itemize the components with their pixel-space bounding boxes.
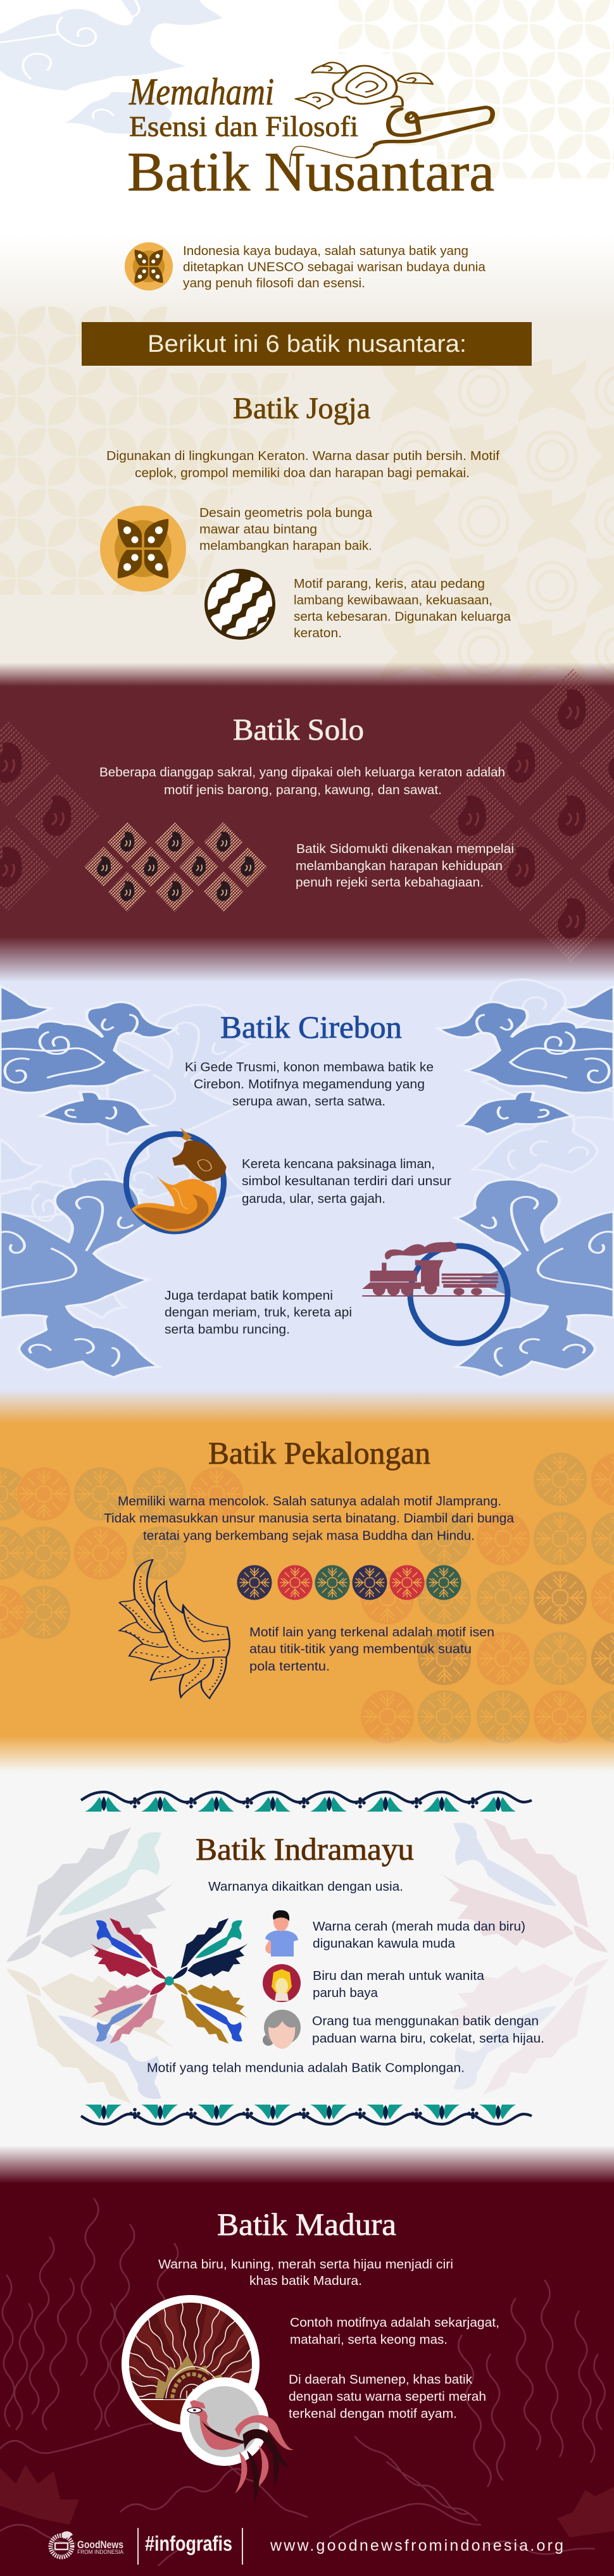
footer: logo: GoodNews xyxy=(77,2539,123,2551)
panel: Batik Pekalongan background xyxy=(0,1389,614,1773)
text block: kompeni xyxy=(165,1289,352,1336)
footer: logo: FROM INDONESIA xyxy=(77,2549,123,2555)
panel: intro and Batik Jogja background xyxy=(0,0,614,690)
heading: Batik Cirebon: Batik Cirebon xyxy=(220,1009,402,1045)
text block: Madura description: khas batik Madura. xyxy=(249,2274,362,2288)
heading: title xyxy=(127,71,494,203)
heading: Batik Pekalongan: Batik Pekalongan xyxy=(208,1435,430,1471)
text block: isen: pola tertentu. xyxy=(249,1660,330,1674)
text block: Sidomukti: Batik Sidomukti dikenakan mempelai xyxy=(296,842,514,856)
icon: sekarjagat sun motif xyxy=(122,2295,260,2432)
text block: Sidomukti: penuh rejeki serta kebahagiaan. xyxy=(296,876,484,890)
icon: middle-aged woman xyxy=(263,1964,301,2002)
text block: kompeni: serta bambu runcing. xyxy=(165,1322,290,1336)
text block: Sumenep xyxy=(289,2373,486,2421)
icon: isen leaf motif xyxy=(120,1560,230,1698)
text block: ceplok: mawar atau bintang xyxy=(199,523,317,537)
text block: Cirebon description: serupa awan, serta satwa. xyxy=(232,1095,385,1109)
text block: Complongan: Motif yang telah mendunia adalah Batik Complongan. xyxy=(147,2062,465,2075)
panel: Batik Madura background xyxy=(0,2146,614,2576)
text block: paksinaga liman: garuda, ular, serta gajah. xyxy=(242,1192,385,1206)
text block: Sumenep: Di daerah Sumenep, khas batik xyxy=(289,2373,473,2387)
footer: logo xyxy=(51,2531,123,2557)
panel: Batik Cirebon background xyxy=(0,980,614,1425)
icon: rooster motif xyxy=(180,2377,294,2503)
text block: parang: Motif parang, keris, atau pedang xyxy=(294,577,485,591)
text block: elderly: Orang tua menggunakan batik dengan xyxy=(312,2015,539,2029)
text block: Sidomukti: melambangkan harapan kehidupan xyxy=(296,859,503,873)
text block: introduction: yang penuh filosofi dan esensi. xyxy=(183,277,365,290)
footer: website: www.goodnewsfromindonesia.org xyxy=(270,2537,563,2554)
text block: sekarjagat: Contoh motifnya adalah sekarjagat, xyxy=(290,2316,499,2330)
text block: Solo description: Beberapa dianggap sakral, yang dipakai oleh keluarga keraton adalah xyxy=(99,766,505,780)
text block: ceplok: Desain geometris pola bunga xyxy=(199,506,373,520)
text block: Sumenep: dengan satu warna seperti merah xyxy=(289,2390,486,2404)
text block: Pekalongan description xyxy=(104,1495,515,1543)
text block: isen: Motif lain yang terkenal adalah motif isen xyxy=(249,1626,494,1640)
text block: ceplok xyxy=(199,506,373,553)
text block: Sidomukti xyxy=(296,842,514,890)
text block: young xyxy=(313,1920,525,1951)
icon: young person xyxy=(265,1910,298,1957)
heading: title: Batik Nusantara xyxy=(127,142,494,203)
text block: Cirebon description xyxy=(185,1061,434,1109)
heading: Batik Solo: Batik Solo xyxy=(233,713,364,747)
heading: Batik Indramayu: Batik Indramayu xyxy=(196,1831,414,1867)
text block: Indramayu intro: Warnanya dikaitkan dengan usia. xyxy=(208,1880,403,1894)
text block: Madura description xyxy=(158,2258,453,2288)
icon: paksinaga liman in ring xyxy=(127,1128,227,1231)
footer: hashtag: #infografis xyxy=(145,2532,232,2555)
text block: elderly xyxy=(312,2015,544,2046)
heading: title: Memahami xyxy=(128,71,274,113)
decoration: top border xyxy=(81,1792,532,1812)
text block: Solo description: motif jenis barong, parang, kawung, dan sawat. xyxy=(164,783,442,797)
text block: paksinaga liman: simbol kesultanan terdiri dari unsur xyxy=(242,1174,451,1188)
text block: paksinaga liman xyxy=(242,1157,451,1206)
text block: Jogja description xyxy=(106,449,499,480)
panel: Batik Indramayu background xyxy=(0,1772,614,2184)
panel: Batik Solo background xyxy=(0,663,614,984)
text block: Sumenep: terkenal dengan motif ayam. xyxy=(289,2407,457,2421)
text block: parang xyxy=(294,577,511,640)
text block: parang: serta kebesaran. Digunakan keluarga xyxy=(294,610,511,624)
banner: six batik: Berikut ini 6 batik nusantara: xyxy=(147,331,467,358)
icon: elderly person xyxy=(263,2010,301,2049)
text block: isen: atau titik-titik yang membentuk suatu xyxy=(249,1643,472,1657)
icon: canting with cloud smoke xyxy=(290,63,492,166)
icon: parang motif xyxy=(204,569,275,640)
text block: introduction: ditetapkan UNESCO sebagai warisan budaya dunia xyxy=(183,261,486,275)
text block: Pekalongan description: teratai yang berkembang sejak masa Buddha dan Hindu. xyxy=(143,1529,475,1543)
text block: Cirebon description: Ki Gede Trusmi, konon membawa batik ke xyxy=(185,1061,434,1074)
text block: Jogja description: ceplok, grompol memiliki doa dan harapan bagi pemakai. xyxy=(135,466,470,480)
text block: Madura description: Warna biru, kuning, merah serta hijau menjadi ciri xyxy=(158,2258,453,2272)
heading: Batik Jogja: Batik Jogja xyxy=(233,392,370,425)
text block: introduction xyxy=(183,244,486,290)
icon: Jlamprang coins xyxy=(237,1565,461,1600)
icon: ceplok motif xyxy=(100,506,186,592)
text block: young: Warna cerah (merah muda dan biru) xyxy=(313,1920,525,1934)
text block: middle-aged: paruh baya xyxy=(313,1986,379,2000)
text block: ceplok: melambangkan harapan baik. xyxy=(199,539,372,553)
icon: Indramayu flower xyxy=(90,1918,248,2044)
text block: Solo description xyxy=(99,766,505,797)
text block: Pekalongan description: Memiliki warna mencolok. Salah satunya adalah motif Jlamprang. xyxy=(118,1495,501,1509)
decoration: bottom border xyxy=(81,2105,532,2124)
icon: Sidomukti motif xyxy=(84,822,267,912)
heading: title: Esensi dan Filosofi xyxy=(129,110,358,142)
text block: parang: keraton. xyxy=(294,626,342,640)
banner: six batik xyxy=(82,322,532,366)
icon: ceplok motif small xyxy=(125,242,173,290)
text block: Cirebon description: Cirebon. Motifnya megamendung yang xyxy=(194,1078,425,1092)
text block: middle-aged: Biru dan merah untuk wanita xyxy=(313,1969,485,1983)
text block: isen xyxy=(249,1626,494,1674)
text block: kompeni: Juga terdapat batik kompeni xyxy=(165,1289,333,1303)
text block: Pekalongan description: Tidak memasukkan unsur manusia serta binatang. Diambil dari bunga xyxy=(104,1512,515,1526)
text block: elderly: paduan warna biru, cokelat, serta hijau. xyxy=(312,2032,544,2046)
text block: sekarjagat xyxy=(290,2316,499,2347)
text block: Jogja description: Digunakan di lingkungan Keraton. Warna dasar putih bersih. Motif xyxy=(106,449,499,463)
heading: Batik Madura: Batik Madura xyxy=(217,2206,396,2242)
text block: parang: lambang kewibawaan, kekuasaan, xyxy=(294,594,492,607)
text block: introduction: Indonesia kaya budaya, salah satunya batik yang xyxy=(183,244,468,258)
text block: kompeni: dengan meriam, truk, kereta api xyxy=(165,1306,352,1320)
text block: young: digunakan kawula muda xyxy=(313,1937,456,1951)
icon: train in ring xyxy=(362,1241,508,1343)
text block: paksinaga liman: Kereta kencana paksinaga liman, xyxy=(242,1157,435,1171)
text block: middle-aged xyxy=(313,1969,485,2000)
text block: sekarjagat: matahari, serta keong mas. xyxy=(290,2333,448,2347)
